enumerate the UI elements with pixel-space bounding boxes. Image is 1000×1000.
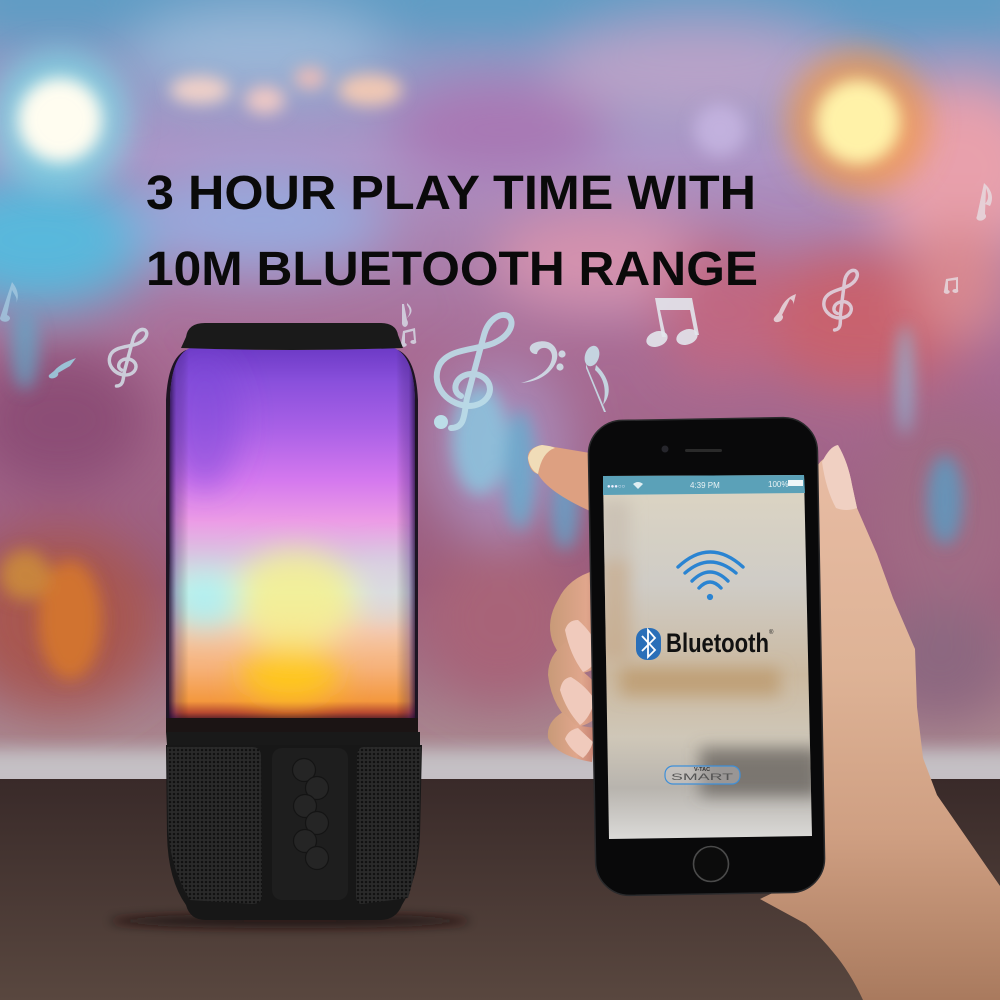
- v-tac smart logo: [665, 766, 740, 784]
- home button: [694, 846, 728, 882]
- fabric mesh right: [356, 747, 421, 904]
- speaker top cap: [181, 323, 403, 350]
- bluetooth logo: ®: [769, 629, 774, 636]
- speaker base collar: [166, 718, 418, 732]
- bluetooth logo: [636, 628, 774, 660]
- icon: wireless signal: [678, 552, 743, 600]
- phone body: [588, 417, 825, 896]
- thumb nail: [822, 445, 857, 510]
- speaker fabric base: [166, 745, 422, 920]
- v-tac smart logo: SMART: [671, 772, 733, 783]
- table surface: [0, 779, 1000, 1000]
- control buttons: [292, 758, 328, 870]
- speaker light panel: [165, 345, 420, 720]
- phone screen: [603, 475, 812, 839]
- icon: small note right: [774, 294, 796, 322]
- status bar: 4:39 PM: [690, 481, 720, 490]
- v-tac smart logo: V-TAC: [694, 767, 710, 773]
- icon: single note centre: [582, 344, 609, 412]
- status bar: ●●●○○: [607, 484, 625, 490]
- icon: small note centre: [402, 303, 412, 327]
- fingers: [550, 570, 610, 673]
- hand behind phone: [528, 445, 1000, 1000]
- fingernails: [560, 620, 601, 758]
- camera and earpiece: [662, 446, 722, 452]
- background: blurred concert scene: [0, 0, 1000, 792]
- screen blur tint: [600, 500, 820, 796]
- icon: note left: [49, 358, 76, 378]
- music notes: [0, 183, 992, 429]
- icon: small beamed note right: [944, 277, 958, 294]
- title: [146, 167, 758, 296]
- status bar: [603, 475, 805, 495]
- title: 10M BLUETOOTH RANGE: [146, 243, 758, 296]
- icon: small beamed note centre: [401, 328, 416, 347]
- icon: treble clef left: [109, 329, 147, 386]
- smartphone: [588, 417, 825, 896]
- icon: large treble clef: [434, 315, 512, 429]
- status bar: 100%: [768, 480, 788, 489]
- speaker glass body: [166, 350, 418, 722]
- speaker shadow: [110, 914, 470, 928]
- index finger: [528, 445, 590, 511]
- icon: treble clef right: [820, 270, 865, 331]
- bluetooth logo: Bluetooth: [666, 628, 769, 658]
- stage lights: [0, 50, 930, 194]
- icon: beamed note: [644, 298, 700, 350]
- control panel: [272, 748, 348, 900]
- speaker: [110, 323, 470, 928]
- title: 3 HOUR PLAY TIME WITH: [146, 167, 756, 220]
- icon: note far left: [0, 282, 18, 322]
- fabric mesh left: [167, 747, 262, 904]
- icon: note far right: [976, 183, 992, 221]
- icon: bass clef: [521, 341, 566, 383]
- forearm and palm: [760, 446, 1000, 1000]
